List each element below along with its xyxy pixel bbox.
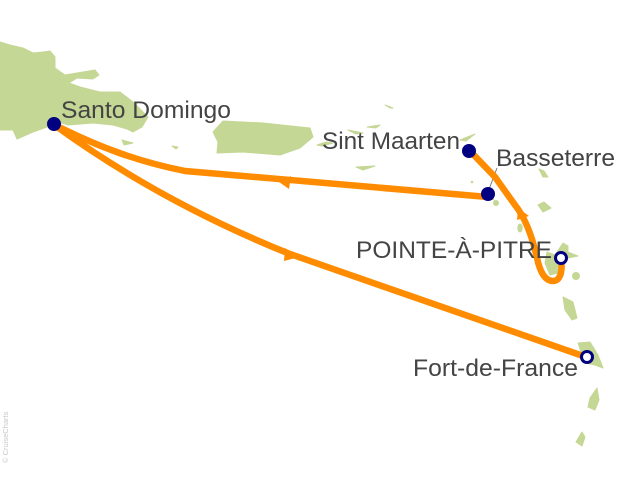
route: island leg — [469, 150, 562, 281]
arrow: return direction — [279, 176, 291, 189]
island: Barbuda — [539, 169, 548, 177]
port marker: Pointe-à-Pitre — [556, 252, 566, 264]
port marker: Santo Domingo — [47, 117, 61, 131]
port marker: Fort-de-France — [582, 352, 592, 362]
island: Saint Croix — [356, 166, 375, 170]
label: Santo Domingo: Santo Domingo — [61, 97, 231, 124]
landmasses — [0, 42, 603, 446]
island: Dominica — [563, 297, 577, 320]
island: Montserrat — [518, 224, 522, 232]
label: Pointe-à-Pitre: POINTE-À-PITRE — [356, 237, 552, 264]
island: Saint Vincent — [576, 432, 585, 446]
island: Marie-Galante — [572, 272, 580, 280]
islands: Virgin Islands — [348, 105, 393, 134]
route: return leg — [53, 124, 488, 197]
island: Saona — [122, 140, 133, 145]
island: Beata — [172, 146, 178, 149]
island: Saint Kitts — [482, 190, 494, 200]
port marker: Basseterre — [481, 187, 495, 201]
island: Vieques — [317, 142, 333, 146]
leader line: Basseterre — [488, 168, 497, 192]
copyright: © CruiseCharts — [1, 411, 10, 463]
island: Hispaniola — [0, 42, 148, 139]
route: outbound leg — [53, 124, 586, 357]
island: Saba — [471, 181, 473, 183]
island: Puerto Rico — [213, 121, 313, 155]
label: Sint Maarten: Sint Maarten — [322, 128, 460, 155]
island: Guadeloupe — [545, 243, 578, 275]
island: Antigua — [538, 202, 551, 212]
island: Martinique — [578, 342, 603, 368]
arrow: northbound direction — [517, 208, 529, 220]
arrow: outbound direction — [284, 248, 299, 261]
island: Anguilla — [460, 134, 475, 141]
island: Saint Lucia — [588, 388, 599, 410]
label: Fort-de-France: Fort-de-France — [413, 355, 578, 382]
label: Basseterre: Basseterre — [496, 145, 615, 172]
island: Nevis — [494, 200, 498, 206]
port marker: Sint Maarten — [462, 144, 476, 158]
